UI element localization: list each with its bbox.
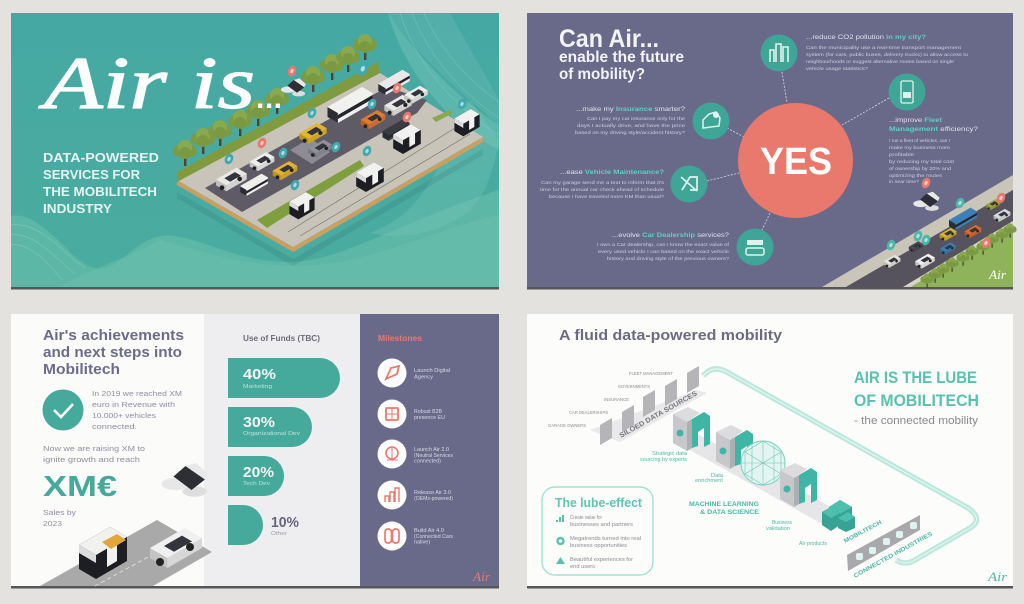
panel: Air is title slide xyxy=(11,13,499,290)
lube item text: Beautiful experiences for xyxy=(570,557,633,563)
icon: fleet phone xyxy=(888,74,926,110)
text: raising: ignite growth and reach xyxy=(43,455,140,464)
text: improve fleet: make my business more xyxy=(889,145,950,151)
machine 1 xyxy=(673,407,710,451)
lube item text: business opportunities xyxy=(570,543,627,549)
subtitle: DATA-POWERED xyxy=(43,150,159,165)
slogan xyxy=(854,368,979,427)
text: insurance: based on my driving style/accident history? xyxy=(575,130,685,136)
panel: fluid data-powered mobility xyxy=(527,314,1013,588)
lube item text: end users xyxy=(570,564,595,570)
milestone 3: connected) xyxy=(414,458,441,464)
text: reduce CO2: vehicle usage statistics? xyxy=(806,66,868,72)
text: improve fleet: profitable xyxy=(889,152,914,158)
text: revenue: 10.000+ vehicles xyxy=(92,411,156,420)
slogan: - the connected mobility xyxy=(854,415,979,427)
Air logo white: Air xyxy=(988,267,1007,282)
Air logo teal: Air xyxy=(987,569,1008,584)
air product cubes xyxy=(822,500,855,532)
icon: dealership xyxy=(736,228,774,266)
conveyor floor xyxy=(672,430,840,524)
lube item text xyxy=(570,515,641,570)
lube item text: businesses and partners xyxy=(570,522,633,528)
milestone 5: Build Air 4.0 xyxy=(414,528,444,534)
heading: of mobility? xyxy=(559,66,645,83)
text: revenue xyxy=(92,389,182,431)
heading xyxy=(43,327,184,378)
text: reduce CO2: system (for cars, public buses, delivery trucks) to allow access to xyxy=(806,52,968,58)
milestone 3: Launch Air 2.0 xyxy=(414,447,449,453)
bar 30%: 30% xyxy=(243,414,275,431)
text: raising: Now we are raising XM to xyxy=(43,444,145,453)
heading: enable the future xyxy=(559,49,684,66)
panel: Can Air enable the future of mobility xyxy=(527,13,1017,290)
text: sales by 2023: 2023 xyxy=(43,519,62,528)
fluid track loop xyxy=(703,369,977,563)
connected industries wall: CONNECTED INDUSTRIES xyxy=(853,531,934,580)
text: insurance xyxy=(575,106,685,136)
milestone 1: Launch Digital xyxy=(414,368,450,374)
text: revenue: In 2019 we reached XM xyxy=(92,389,182,398)
data source labels: CAR DEALERSHIPS xyxy=(569,410,608,415)
bar 10%: Other xyxy=(271,531,287,537)
bar 20% xyxy=(228,456,284,496)
callout: lube-effect xyxy=(542,487,653,575)
process labels: Data xyxy=(711,473,723,479)
icon: insurance car xyxy=(692,102,730,140)
text: reduce CO2: neighbourhoods or suggest alternative routes based on single xyxy=(806,59,954,65)
title: Air is... xyxy=(38,43,282,125)
icon: bars xyxy=(557,515,563,522)
heading: A fluid data-powered mobility xyxy=(559,327,783,344)
slogan: AIR IS THE LUBE xyxy=(854,368,977,387)
isometric street illustration xyxy=(173,34,483,266)
callout: lube-effect: The lube-effect xyxy=(555,495,643,510)
machine 2 xyxy=(716,425,753,469)
bar 40%: Marketing xyxy=(243,384,272,390)
text: reduce CO2: Can the municipality use a real-time transport management xyxy=(806,45,962,51)
background waves xyxy=(11,13,499,287)
Air logo coral: Air xyxy=(472,569,491,584)
process labels xyxy=(640,451,828,547)
lube item text: Megatrends turned into real xyxy=(570,536,641,542)
icon: maintenance xyxy=(670,166,708,202)
subtitle xyxy=(43,150,159,216)
text: sales by 2023: Sales by xyxy=(43,508,76,517)
text: vehicle maintenance xyxy=(540,169,665,200)
bar 40% xyxy=(228,358,340,398)
text: raising xyxy=(43,444,145,464)
text: reduce CO2: ...reduce CO2 pollution in my city? xyxy=(806,34,926,41)
data source labels: GOVERNMENTS xyxy=(618,384,650,389)
icon: network xyxy=(556,557,565,564)
text: improve fleet: optimizing the routes xyxy=(889,173,943,179)
panel section: milestones xyxy=(360,314,499,586)
title: Air is...: ... xyxy=(256,82,282,115)
bar 30% xyxy=(228,407,312,447)
panel section: milestones: Milestones xyxy=(378,333,422,343)
process labels: Air products xyxy=(799,541,828,547)
milestone 1: Agency xyxy=(414,374,434,380)
machine 3 xyxy=(780,463,817,507)
subtitle: SERVICES FOR xyxy=(43,167,141,182)
milestone 5: (Connected Cars xyxy=(414,534,454,540)
label: machine learning xyxy=(689,501,760,516)
text: improve fleet: ...improve Fleet xyxy=(889,117,943,124)
illustration: pod vehicle xyxy=(162,463,208,497)
text: revenue: connected. xyxy=(92,422,137,431)
text: reduce CO2 xyxy=(806,34,968,72)
title: Air is...: Air is xyxy=(38,43,255,125)
milestone 3 xyxy=(378,440,453,468)
lube item text: Create value for xyxy=(570,515,602,521)
bar 20%: Tech Dev xyxy=(243,481,270,487)
illustration: road with vehicles xyxy=(40,520,212,586)
text: improve fleet: I run a fleet of vehicles, can I xyxy=(889,138,950,144)
panel section: use of funds: Use of Funds (TBC) xyxy=(243,333,320,343)
milestone 2: Robust B2B xyxy=(414,409,443,415)
text: car dealership: ...evolve Car Dealership services? xyxy=(612,232,729,239)
milestone 3: (Neutral Services xyxy=(414,453,453,459)
heading xyxy=(559,25,684,83)
label: machine learning: MACHINE LEARNING xyxy=(689,501,759,508)
globe: machine learning xyxy=(741,441,785,485)
panel: achievements and next steps xyxy=(11,314,499,588)
process labels: enrichment xyxy=(695,478,724,484)
data source labels xyxy=(548,371,673,428)
label: machine learning: & DATA SCIENCE xyxy=(700,509,760,516)
text: improve fleet: in near time? xyxy=(889,179,919,185)
siloed data sources platform xyxy=(590,366,707,445)
text: vehicle maintenance: time for the annual car check ahead of schedule xyxy=(540,187,664,193)
text: improve fleet: by reducing my total cost xyxy=(889,159,955,165)
text: sales by 2023 xyxy=(43,508,76,528)
data source labels: INSURANCE xyxy=(604,397,629,402)
dashed connectors xyxy=(707,72,889,230)
text: vehicle maintenance: ...ease Vehicle Maintenance? xyxy=(560,169,664,176)
heading: Mobilitech xyxy=(43,361,120,378)
icon: gear xyxy=(558,538,564,544)
subtitle: THE MOBILITECH xyxy=(43,184,157,199)
milestone 2 xyxy=(378,400,445,428)
text: insurance: Can I pay my car insurance only for the xyxy=(587,116,685,122)
milestone 4: Release Air 3.0 xyxy=(414,490,451,496)
bar 10%: 10% xyxy=(271,514,299,531)
text: revenue: euro in Revenue with xyxy=(92,400,175,409)
data source labels: FLEET MANAGEMENT xyxy=(629,371,673,376)
YES circle xyxy=(738,103,853,218)
milestone 4 xyxy=(378,480,453,510)
text: car dealership: every used vehicle I can based on the exact vehicle xyxy=(598,249,729,255)
milestone 1 xyxy=(378,358,450,388)
heading: Can Air... xyxy=(559,25,659,53)
icon: city xyxy=(760,34,798,72)
text: vehicle maintenance: Can my garage send me a text to inform that it's xyxy=(541,180,665,186)
connected industries wall xyxy=(843,515,934,580)
street illustration corner xyxy=(822,175,1017,288)
bar 20%: 20% xyxy=(243,464,274,481)
process labels: sourcing by experts xyxy=(640,457,688,463)
text: insurance: ...make my Insurance smarter? xyxy=(576,106,685,113)
heading: Air's achievements xyxy=(43,327,184,344)
process labels: Strategic data xyxy=(652,451,687,457)
text: car dealership: I own a Car dealership, can I know the exact value of xyxy=(597,242,730,248)
subtitle: INDUSTRY xyxy=(43,201,112,216)
milestone 4: (OEMs-powered) xyxy=(414,496,453,502)
slogan: OF MOBILITECH xyxy=(854,391,979,410)
text: improve fleet: of ownership by 20% and xyxy=(889,166,951,172)
data source labels: GARAGE OWNERS xyxy=(548,423,586,428)
bar 30%: Organizational Dev xyxy=(243,431,300,437)
text: improve fleet: Management efficiency? xyxy=(889,126,978,133)
process labels: validation xyxy=(766,526,790,532)
text: vehicle maintenance: because I have traveled more KM than usual? xyxy=(549,194,664,200)
heading: and next steps into xyxy=(43,344,182,361)
text: improve fleet xyxy=(889,117,978,185)
milestone 5: native) xyxy=(414,540,430,546)
big figure XM€: XM€ xyxy=(43,471,117,503)
text: car dealership xyxy=(597,232,730,262)
process labels: Business xyxy=(772,520,792,526)
connected industries wall: MOBILITECH xyxy=(843,520,883,545)
icon: check mark xyxy=(42,390,84,430)
milestone 5 xyxy=(378,522,454,550)
panel section: use of funds xyxy=(204,314,360,586)
text: insurance: days I actually drive, and have the price xyxy=(577,123,685,129)
milestone 2: presence EU xyxy=(414,415,445,421)
siloed data sources platform: SILOED DATA SOURCES xyxy=(619,390,699,440)
bar 10% xyxy=(228,505,299,545)
YES circle: YES xyxy=(760,141,832,183)
text: car dealership: history and driving style of the previous owners? xyxy=(607,256,729,262)
bar 40%: 40% xyxy=(243,366,276,383)
